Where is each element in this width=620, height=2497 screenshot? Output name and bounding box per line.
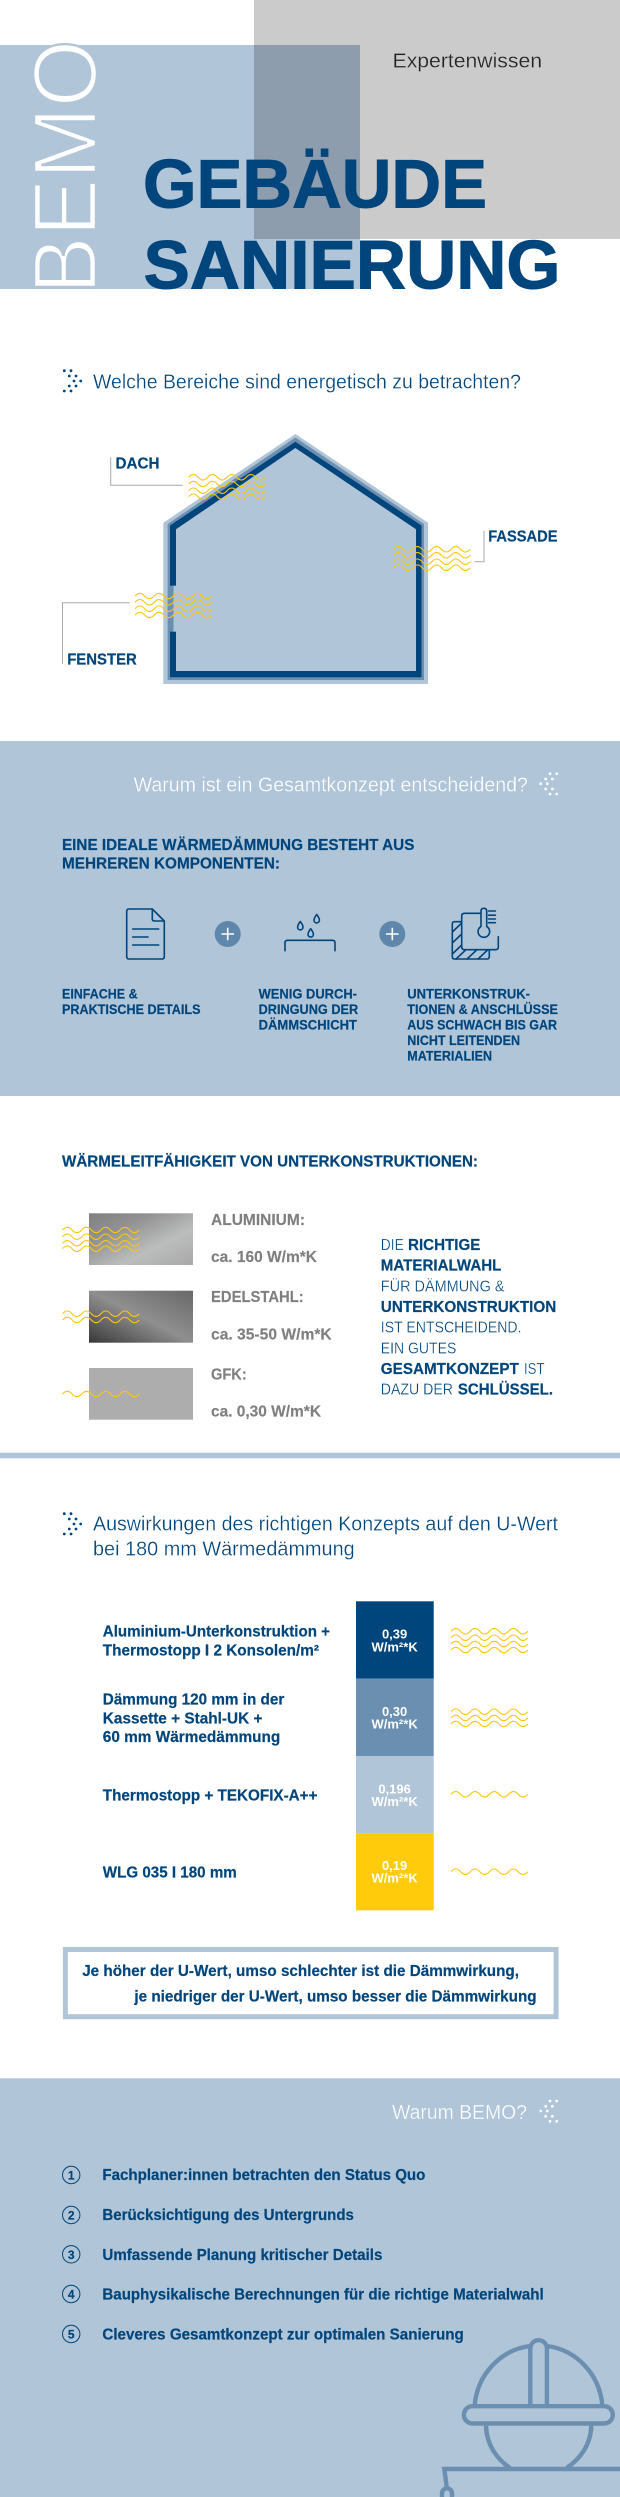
label: aluminium: ca. 160 W/m*K <box>211 1249 318 1266</box>
label: Tekofix: Thermostopp + TEKOFIX-A++ <box>103 1788 318 1805</box>
icon: hard hat worker <box>442 2340 620 2497</box>
text: low penetration: DRINGUNG DER <box>259 1002 358 1017</box>
text: substructures: MATERIALIEN <box>407 1049 492 1064</box>
panel: thermal conductivity <box>62 1154 556 1421</box>
text: key message: GESAMTKONZEPT <box>381 1361 519 1378</box>
callout: Fenster: FENSTER <box>67 651 137 668</box>
text: substructures <box>407 987 558 1064</box>
text: key message <box>381 1237 556 1399</box>
bar: 0,30: 0,30 <box>382 1704 407 1719</box>
text: key message: IST <box>524 1361 545 1378</box>
bar: 0,19: 0,19 <box>382 1858 407 1873</box>
title: SANIERUNG <box>144 227 560 304</box>
chart: U-value stacked column <box>356 1601 434 1910</box>
bar: 0,19: W/m²*K <box>371 1871 418 1886</box>
bar: 0,30: W/m²*K <box>371 1717 418 1732</box>
label: cassette: Dämmung 120 mm in der <box>103 1692 284 1709</box>
label: aluminium substructure: Thermostopp I 2 Konsolen/m² <box>103 1642 319 1659</box>
list item 4: Bauphysikalische Berechnungen für die richtige Materialwahl <box>102 2287 544 2304</box>
text: low penetration: WENIG DURCH- <box>259 987 357 1002</box>
heat waves: roof <box>189 475 265 499</box>
icon: dots white <box>539 772 558 795</box>
list item 1: Fachplaner:innen betrachten den Status Quo <box>102 2167 425 2184</box>
vertical brand word: BEMO <box>16 40 116 294</box>
panel: U-value impact <box>63 1512 558 2017</box>
bar: 0,196: 0,196 <box>378 1781 411 1796</box>
swatch: GFK <box>89 1368 193 1420</box>
heat waves: window <box>135 593 212 618</box>
list item 3: 3 <box>68 2248 75 2262</box>
label: stainless steel <box>211 1289 333 1343</box>
label: cassette: Kassette + Stahl-UK + <box>103 1710 262 1727</box>
callout: Fassade: FASSADE <box>488 528 558 545</box>
heat wave: row 4 <box>451 1869 528 1874</box>
text: substructures: AUS SCHWACH BIS GAR <box>407 1018 557 1033</box>
label: GFK: ca. 0,30 W/m*K <box>211 1404 322 1421</box>
heat waves: row 2 <box>451 1709 528 1727</box>
list item 2: Berücksichtigung des Untergrunds <box>102 2207 354 2224</box>
callout: Dach: DACH <box>116 456 160 473</box>
house diagram <box>163 434 428 684</box>
heading: U-value impact <box>93 1514 558 1560</box>
icon: plus <box>379 921 405 947</box>
bar: 0,196: W/m²*K <box>371 1794 418 1809</box>
heat waves: row 1 <box>451 1629 528 1653</box>
text: key message: MATERIALWAHL <box>381 1258 502 1275</box>
panel: header <box>0 0 620 304</box>
icon: document <box>127 909 164 959</box>
list item 1: 1 <box>68 2168 75 2182</box>
bar: 0,196 <box>356 1756 434 1833</box>
icon: dots <box>63 1512 82 1535</box>
list item 2: 2 <box>68 2208 75 2222</box>
label: aluminium: ALUMINIUM: <box>211 1212 305 1229</box>
heat wave: GFK <box>62 1391 139 1397</box>
heading: overall concept: Warum ist ein Gesamtkonzept entscheidend? <box>134 775 528 797</box>
heat wave: row 3 <box>451 1792 528 1797</box>
subheading: components: MEHREREN KOMPONENTEN: <box>62 856 280 873</box>
panel: building areas <box>62 369 558 684</box>
text: key message: DAZU DER <box>381 1382 453 1399</box>
icon: plus <box>215 921 241 947</box>
text: key message: EIN GUTES <box>381 1340 456 1357</box>
callout box: Je höher der U-Wert, umso schlechter ist die Dämmwirkung, <box>82 1963 519 1980</box>
text: low penetration <box>259 987 358 1033</box>
swatch: stainless steel <box>89 1291 193 1343</box>
subheading: components <box>62 837 414 873</box>
callout: Dach <box>111 456 183 485</box>
heading: why BEMO: Warum BEMO? <box>392 2102 527 2124</box>
label: GFK <box>211 1366 322 1421</box>
text: key message: FÜR DÄMMUNG & <box>381 1277 505 1295</box>
heading: thermal conductivity: WÄRMELEITFÄHIGKEIT VON UNTERKONSTRUKTIONEN: <box>62 1154 478 1171</box>
label: aluminium substructure: Aluminium-Unterkonstruktion + <box>103 1624 330 1641</box>
heat waves: aluminium <box>62 1227 139 1251</box>
label: aluminium substructure <box>103 1624 330 1659</box>
title: GEBÄUDE <box>143 146 487 222</box>
icon: dots <box>63 369 82 392</box>
callout: Fenster <box>62 603 137 668</box>
list item 3: Umfassende Planung kritischer Details <box>102 2247 382 2264</box>
list item 5: Cleveres Gesamtkonzept zur optimalen Sanierung <box>102 2326 464 2343</box>
list item 4: 4 <box>68 2288 75 2302</box>
bar: 0,19 <box>356 1833 434 1910</box>
bar: 0,30 <box>356 1679 434 1756</box>
subheading: components: EINE IDEALE WÄRMEDÄMMUNG BESTEHT AUS <box>62 837 414 854</box>
text: substructures: NICHT LEITENDEN <box>407 1033 520 1048</box>
text: substructures: TIONEN & ANSCHLÜSSE <box>407 1002 558 1017</box>
heat waves: stainless steel <box>62 1311 139 1323</box>
bar: 0,39 <box>356 1601 434 1679</box>
callout: Fassade <box>474 528 558 562</box>
label: cassette: 60 mm Wärmedämmung <box>103 1729 280 1746</box>
text: key message: DIE <box>381 1237 404 1254</box>
heat waves: facade <box>393 547 470 570</box>
panel: why BEMO <box>0 2078 620 2497</box>
label: cassette <box>103 1692 284 1746</box>
bar: 0,39: 0,39 <box>382 1627 407 1642</box>
text: key message: RICHTIGE <box>408 1237 481 1254</box>
text: key message: UNTERKONSTRUKTION <box>381 1299 556 1316</box>
text: simple details <box>62 987 200 1017</box>
icon: water drops on layer <box>285 914 335 951</box>
label: GFK: GFK: <box>211 1366 247 1383</box>
text: simple details: EINFACHE & <box>62 987 138 1002</box>
text: key message: SCHLÜSSEL. <box>458 1380 553 1399</box>
label: WLG 035: WLG 035 I 180 mm <box>103 1864 237 1881</box>
callout box: je niedriger der U-Wert, umso besser die Dämmwirkung <box>133 1988 537 2005</box>
icon: thermometer with layers <box>452 908 498 959</box>
label: stainless steel: ca. 35-50 W/m*K <box>211 1326 333 1343</box>
list item 5: 5 <box>68 2328 75 2342</box>
label: aluminium <box>211 1212 318 1266</box>
label: stainless steel: EDELSTAHL: <box>211 1289 304 1306</box>
text: simple details: PRAKTISCHE DETAILS <box>62 1002 200 1017</box>
panel: overall concept <box>0 741 620 1096</box>
text: substructures: UNTERKONSTRUK- <box>407 987 530 1002</box>
bar: 0,39: W/m²*K <box>371 1639 418 1654</box>
text: key message: IST ENTSCHEIDEND. <box>381 1320 522 1337</box>
callout box <box>65 1950 556 2017</box>
heading: U-value impact: bei 180 mm Wärmedämmung <box>93 1538 355 1560</box>
label: Expertenwissen: Expertenwissen <box>393 51 542 73</box>
icon: dots white <box>539 2100 558 2123</box>
swatch: aluminium <box>89 1213 193 1265</box>
heading: areas: Welche Bereiche sind energetisch zu betrachten? <box>93 371 521 393</box>
heading: U-value impact: Auswirkungen des richtigen Konzepts auf den U-Wert <box>93 1514 558 1536</box>
title <box>143 146 560 304</box>
text: low penetration: DÄMMSCHICHT <box>259 1018 358 1033</box>
